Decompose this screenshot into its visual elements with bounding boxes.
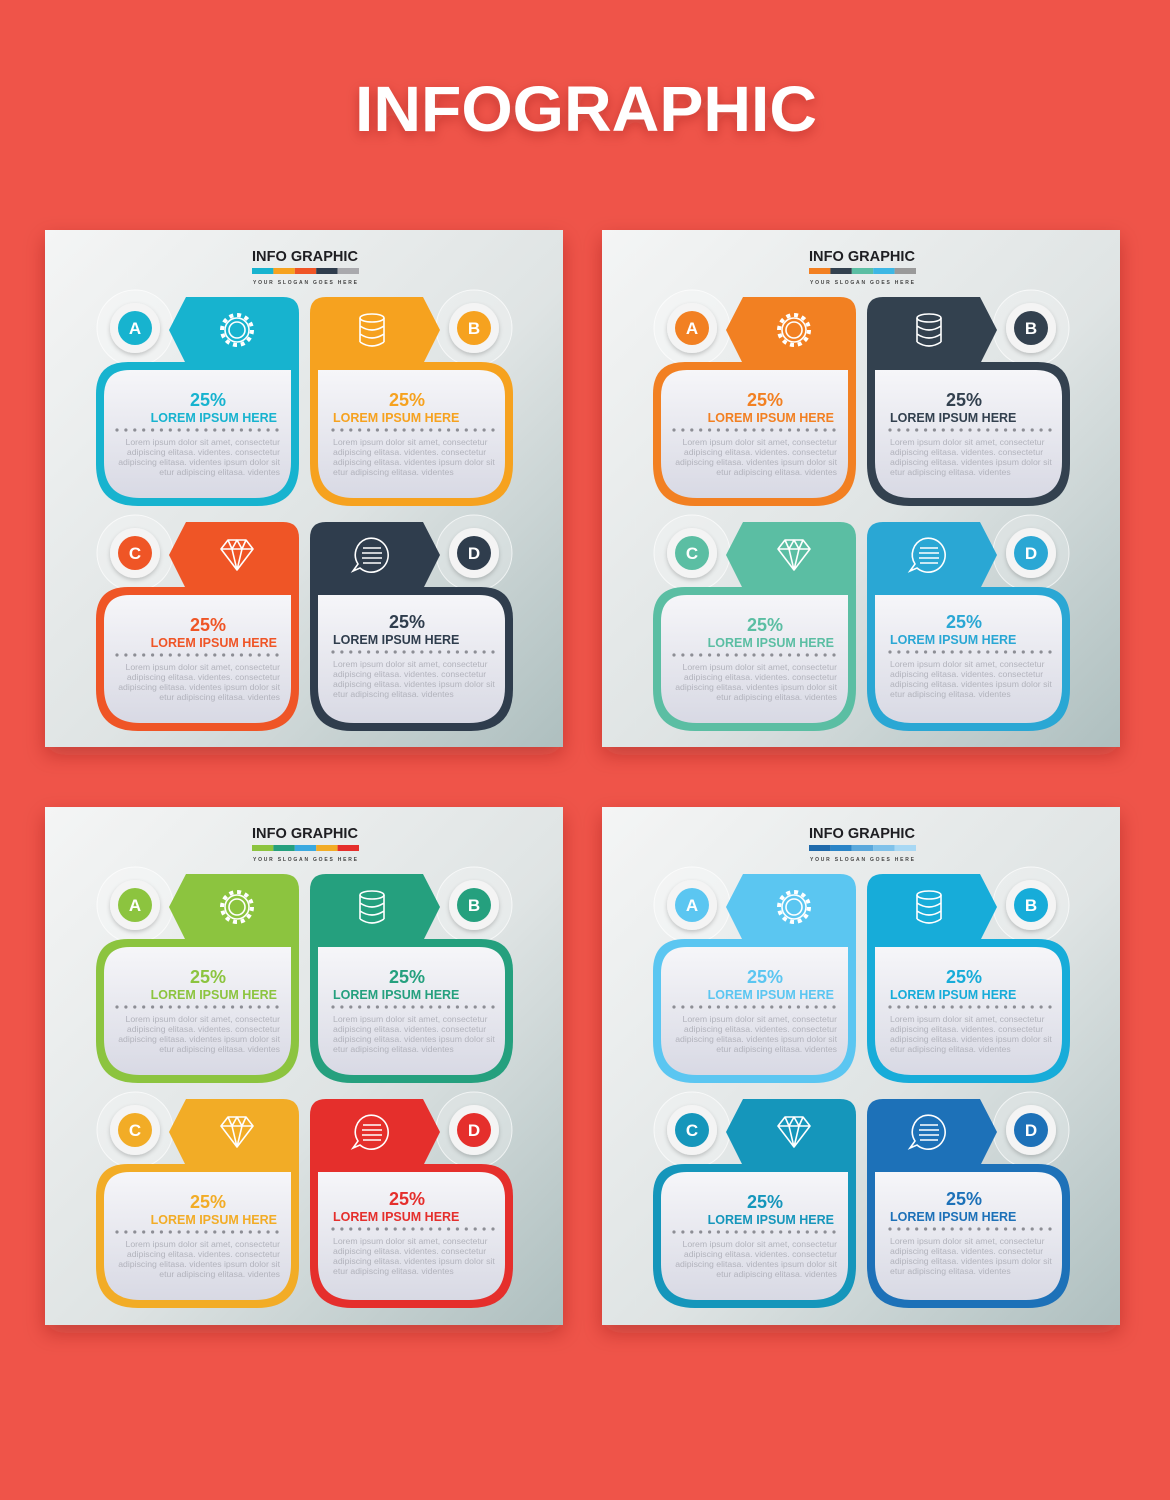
panel header: YOUR SLOGAN GOES HERE	[810, 280, 915, 286]
card B: etur adipiscing elitasa. videntes	[333, 1044, 454, 1054]
card C: etur adipiscing elitasa. videntes	[159, 1269, 281, 1279]
card B: adipiscing elitasa. videntes. consectetur	[890, 1024, 1043, 1034]
card D: etur adipiscing elitasa. videntes	[333, 689, 454, 699]
card D: adipiscing elitasa. videntes ipsum dolor sit	[890, 1256, 1052, 1266]
card A	[653, 290, 856, 506]
panel header	[809, 825, 916, 863]
card A: Lorem ipsum dolor sit amet, consectetur	[125, 1014, 280, 1024]
panel: version 4	[602, 807, 1120, 1325]
card A: LOREM IPSUM HERE	[151, 411, 277, 425]
panel: version 3	[45, 807, 563, 1325]
card A: 25%	[190, 390, 226, 410]
card C: C	[129, 1121, 141, 1140]
card D	[310, 1092, 513, 1308]
card A: adipiscing elitasa. videntes. consectetur	[127, 1024, 280, 1034]
card D: etur adipiscing elitasa. videntes	[890, 689, 1011, 699]
card B: adipiscing elitasa. videntes. consectetur	[890, 447, 1043, 457]
card B: Lorem ipsum dolor sit amet, consectetur	[890, 437, 1045, 447]
card A: adipiscing elitasa. videntes ipsum dolor sit	[675, 457, 838, 467]
card A: etur adipiscing elitasa. videntes	[159, 1044, 281, 1054]
card D: LOREM IPSUM HERE	[333, 1210, 459, 1224]
card C: 25%	[747, 1192, 783, 1212]
card D	[867, 515, 1070, 731]
card C: adipiscing elitasa. videntes ipsum dolor sit	[675, 682, 838, 692]
card D: 25%	[946, 612, 982, 632]
card D: D	[1025, 1121, 1037, 1140]
card A: etur adipiscing elitasa. videntes	[716, 467, 838, 477]
card D: adipiscing elitasa. videntes. consectetur	[333, 669, 486, 679]
card A: A	[686, 319, 698, 338]
card C: Lorem ipsum dolor sit amet, consectetur	[682, 662, 837, 672]
card C: adipiscing elitasa. videntes. consectetur	[127, 1249, 280, 1259]
card C: C	[686, 1121, 698, 1140]
card B	[310, 290, 513, 506]
card C	[96, 1092, 299, 1308]
panel header	[252, 825, 359, 863]
card B: 25%	[946, 967, 982, 987]
card B: 25%	[389, 390, 425, 410]
card B: 25%	[389, 967, 425, 987]
card C: adipiscing elitasa. videntes. consectetur	[127, 672, 280, 682]
card C	[653, 515, 856, 731]
card A	[96, 867, 299, 1083]
card D: LOREM IPSUM HERE	[890, 1210, 1016, 1224]
card A: Lorem ipsum dolor sit amet, consectetur	[125, 437, 280, 447]
panel header: YOUR SLOGAN GOES HERE	[810, 857, 915, 863]
card C: C	[686, 544, 698, 563]
card C: LOREM IPSUM HERE	[151, 1213, 277, 1227]
card B: adipiscing elitasa. videntes ipsum dolor sit	[890, 457, 1052, 467]
card A: A	[686, 896, 698, 915]
card C: adipiscing elitasa. videntes. consectetur	[684, 1249, 837, 1259]
card B: B	[468, 896, 480, 915]
card D: LOREM IPSUM HERE	[333, 633, 459, 647]
card A: Lorem ipsum dolor sit amet, consectetur	[682, 1014, 837, 1024]
panel: version 1	[45, 230, 563, 747]
card D: D	[468, 1121, 480, 1140]
card D: adipiscing elitasa. videntes ipsum dolor sit	[333, 1256, 495, 1266]
card C: Lorem ipsum dolor sit amet, consectetur	[125, 1239, 280, 1249]
card D: adipiscing elitasa. videntes ipsum dolor sit	[333, 679, 495, 689]
card A: adipiscing elitasa. videntes ipsum dolor sit	[118, 457, 281, 467]
card C: 25%	[747, 615, 783, 635]
card C: C	[129, 544, 141, 563]
card A: adipiscing elitasa. videntes ipsum dolor sit	[675, 1034, 838, 1044]
card A: etur adipiscing elitasa. videntes	[159, 467, 281, 477]
card B: Lorem ipsum dolor sit amet, consectetur	[333, 1014, 488, 1024]
card C: 25%	[190, 615, 226, 635]
card D	[310, 515, 513, 731]
card B	[867, 867, 1070, 1083]
card D: Lorem ipsum dolor sit amet, consectetur	[333, 659, 488, 669]
card A: LOREM IPSUM HERE	[151, 988, 277, 1002]
card D: LOREM IPSUM HERE	[890, 633, 1016, 647]
card C: 25%	[190, 1192, 226, 1212]
card C: etur adipiscing elitasa. videntes	[159, 692, 281, 702]
card D: Lorem ipsum dolor sit amet, consectetur	[890, 659, 1045, 669]
card A: LOREM IPSUM HERE	[708, 988, 834, 1002]
card A: adipiscing elitasa. videntes. consectetur	[127, 447, 280, 457]
card B: etur adipiscing elitasa. videntes	[333, 467, 454, 477]
card C: etur adipiscing elitasa. videntes	[716, 1269, 838, 1279]
card B: B	[468, 319, 480, 338]
card D: adipiscing elitasa. videntes. consectetur	[890, 1246, 1043, 1256]
card B: adipiscing elitasa. videntes. consectetur	[333, 447, 486, 457]
card C: adipiscing elitasa. videntes ipsum dolor sit	[675, 1259, 838, 1269]
card B: adipiscing elitasa. videntes. consectetur	[333, 1024, 486, 1034]
card B: LOREM IPSUM HERE	[333, 411, 459, 425]
card C: etur adipiscing elitasa. videntes	[716, 692, 838, 702]
card B: B	[1025, 319, 1037, 338]
card B: LOREM IPSUM HERE	[333, 988, 459, 1002]
card A: adipiscing elitasa. videntes. consectetur	[684, 447, 837, 457]
card D: adipiscing elitasa. videntes ipsum dolor sit	[890, 679, 1052, 689]
card A: LOREM IPSUM HERE	[708, 411, 834, 425]
card B	[867, 290, 1070, 506]
card B	[310, 867, 513, 1083]
card A: 25%	[747, 390, 783, 410]
card C: adipiscing elitasa. videntes ipsum dolor sit	[118, 1259, 281, 1269]
panel header	[252, 248, 359, 286]
card A: A	[129, 319, 141, 338]
card C	[96, 515, 299, 731]
panel header: INFO GRAPHIC	[809, 248, 915, 265]
card B: adipiscing elitasa. videntes ipsum dolor sit	[333, 457, 495, 467]
card C: Lorem ipsum dolor sit amet, consectetur	[682, 1239, 837, 1249]
panel header	[809, 248, 916, 286]
card A: etur adipiscing elitasa. videntes	[716, 1044, 838, 1054]
card D: adipiscing elitasa. videntes. consectetur	[890, 669, 1043, 679]
card A: adipiscing elitasa. videntes. consectetur	[684, 1024, 837, 1034]
card D	[867, 1092, 1070, 1308]
panel header: INFO GRAPHIC	[252, 248, 358, 265]
card A: A	[129, 896, 141, 915]
panel header: YOUR SLOGAN GOES HERE	[253, 857, 358, 863]
card C: LOREM IPSUM HERE	[708, 1213, 834, 1227]
card C: LOREM IPSUM HERE	[708, 636, 834, 650]
panel header: YOUR SLOGAN GOES HERE	[253, 280, 358, 286]
card D: D	[468, 544, 480, 563]
card A: adipiscing elitasa. videntes ipsum dolor sit	[118, 1034, 281, 1044]
card C: adipiscing elitasa. videntes ipsum dolor sit	[118, 682, 281, 692]
card D: 25%	[389, 1189, 425, 1209]
card B: LOREM IPSUM HERE	[890, 988, 1016, 1002]
card D: etur adipiscing elitasa. videntes	[890, 1266, 1011, 1276]
card B: adipiscing elitasa. videntes ipsum dolor sit	[890, 1034, 1052, 1044]
card B: 25%	[946, 390, 982, 410]
card D: adipiscing elitasa. videntes. consectetur	[333, 1246, 486, 1256]
card B: etur adipiscing elitasa. videntes	[890, 1044, 1011, 1054]
card A	[653, 867, 856, 1083]
card C: LOREM IPSUM HERE	[151, 636, 277, 650]
card D: D	[1025, 544, 1037, 563]
card D: Lorem ipsum dolor sit amet, consectetur	[333, 1236, 488, 1246]
card A: Lorem ipsum dolor sit amet, consectetur	[682, 437, 837, 447]
card C: Lorem ipsum dolor sit amet, consectetur	[125, 662, 280, 672]
card C: adipiscing elitasa. videntes. consectetur	[684, 672, 837, 682]
card D: 25%	[946, 1189, 982, 1209]
card A: 25%	[747, 967, 783, 987]
panel header: INFO GRAPHIC	[809, 825, 915, 842]
card C	[653, 1092, 856, 1308]
card D: etur adipiscing elitasa. videntes	[333, 1266, 454, 1276]
card B: Lorem ipsum dolor sit amet, consectetur	[890, 1014, 1045, 1024]
card B: LOREM IPSUM HERE	[890, 411, 1016, 425]
card D: 25%	[389, 612, 425, 632]
card A	[96, 290, 299, 506]
panel header: INFO GRAPHIC	[252, 825, 358, 842]
card B: B	[1025, 896, 1037, 915]
card B: adipiscing elitasa. videntes ipsum dolor sit	[333, 1034, 495, 1044]
card D: Lorem ipsum dolor sit amet, consectetur	[890, 1236, 1045, 1246]
card B: Lorem ipsum dolor sit amet, consectetur	[333, 437, 488, 447]
card A: 25%	[190, 967, 226, 987]
card B: etur adipiscing elitasa. videntes	[890, 467, 1011, 477]
panel: version 2	[602, 230, 1120, 747]
title: INFOGRAPHIC	[355, 73, 817, 145]
